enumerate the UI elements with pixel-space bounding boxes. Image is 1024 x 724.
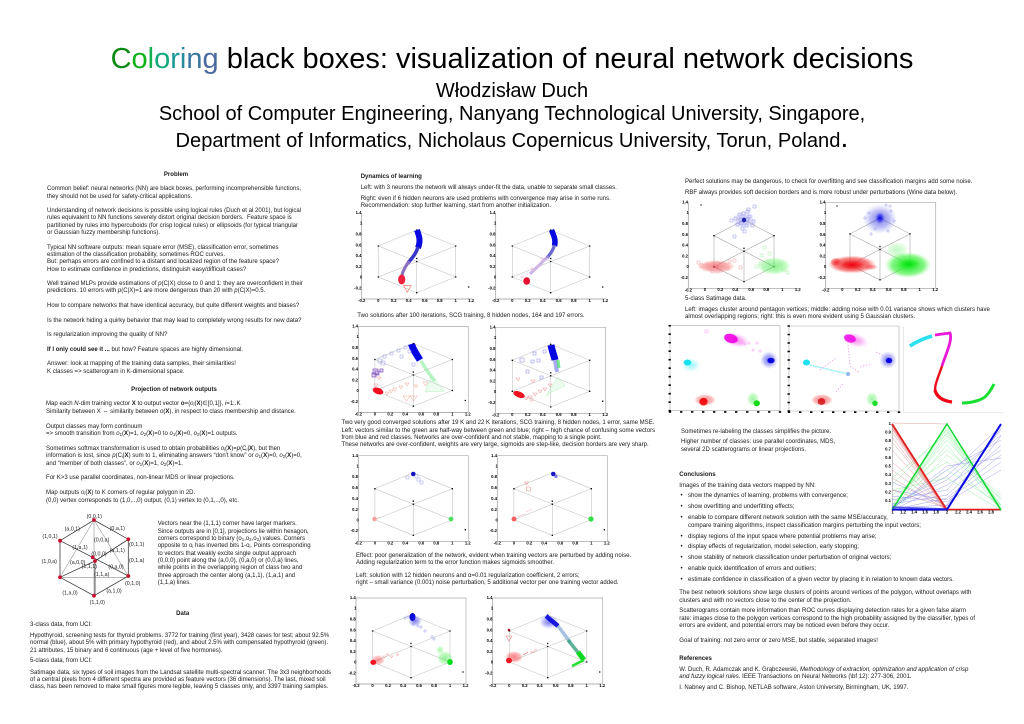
bullet list: conclusions: display regions of the input space where potential problems may arise; <box>688 534 877 540</box>
chart: parallel coordinates: 0.2 <box>885 490 892 494</box>
text: higher number of classes <box>681 438 835 453</box>
text: problem: Understanding of network decisions is possible using logical rules (Duch et al 2001), but logical <box>47 208 301 214</box>
text: hypothyroid: 21 attributes, 15 binary and 6 continuous (age + level of five hormones). <box>30 648 222 654</box>
caption: two solutions after 100 iterations: Two solutions after 100 iterations, SCG training, 8 hidden nodes, 164 and 197 errors. <box>357 313 585 319</box>
text: problem: estimation of the classification probability, sometimes ROC curves. <box>47 252 225 258</box>
text: hexagon explanation: while points in the overlapping region of class two and <box>158 565 302 571</box>
text: projection <box>46 400 302 504</box>
text: scatterograms vs ROC: errors are evident, and potential errors may be noticed even before they occur. <box>679 623 889 629</box>
text: data 5-class label: 5-class data, from UCI: <box>30 658 92 664</box>
diagram: hexagon of output vectors: (1,1,a) <box>94 572 110 578</box>
text: right convergence: Recommendation: stop further learning, start from another initialization. <box>361 203 551 209</box>
text: problem: Is regularization improving the quality of NN? <box>47 332 167 338</box>
bullet list: conclusions: • <box>680 544 683 550</box>
text: satimage description: almost overlapping regions; right: this is even more evident using 5 Gaussian clusters. <box>685 314 915 320</box>
chart: parallel coordinates: 1 <box>889 421 892 426</box>
text: best solutions: clusters and with no vectors close to the center of the projection. <box>679 598 851 604</box>
text: hypothyroid: Hypothyroid, screening tests for thyroid problems. 3772 for training (first year), 3428 cases for test; about 92.5% <box>30 633 329 639</box>
text: problem: partitioned by rules into hypercuboids (for crisp logical rules) or ellipsoids (for typical triangular <box>47 223 298 229</box>
chart: 6 neurons, 100 iterations <box>488 210 609 303</box>
heading: dynamics of learning: Dynamics of learning <box>361 174 422 180</box>
text: reference 1: W. Duch, R. Adamczak and K. Grąbczewski, Methodology of extraction, optimization and application of crisp <box>679 667 968 673</box>
caption: converged solutions: These networks are over-confident, weights are very large, sigmoids are step-like, decision borders are very sharp. <box>342 442 649 448</box>
chart: parallel coordinates: 2.6 <box>977 510 984 514</box>
text: problem: rules equivalent to NN functions severely distort original decision borders. Feature space is <box>47 215 292 221</box>
text: problem: Well trained MLPs provide estimations of p(C|X) close to 0 and 1: they are overconfident in their <box>47 281 303 287</box>
bullet list: conclusions: estimate confidence in classification of a given vector by placing it in relation to known data vectors. <box>688 577 954 583</box>
text: projection: Map each N-dim training vector X to output vector o={oi(X)∈[0,1]}, i=1..K <box>46 401 241 407</box>
chart: satimage clusters <box>668 326 781 412</box>
chart: parallel coordinates: 1 <box>891 510 894 514</box>
heading: references: References <box>679 656 712 662</box>
diagram: hexagon of output vectors: (1,1,0) <box>90 600 105 606</box>
text: effect <box>356 552 631 566</box>
text: projection: Output classes may form continuum <box>46 424 142 430</box>
chart: parallel coordinates: 1.8 <box>933 510 940 514</box>
chart: parallel coordinates: 1.2 <box>900 510 907 514</box>
chart: parallel coordinates: 0.3 <box>885 481 892 486</box>
chart: parallel coordinates: 1.6 <box>922 510 929 514</box>
text: effect: Effect: poor generalization of the network, evident when training vectors are perturbed by adding noise. <box>356 553 631 559</box>
text: hexagon explanation: Vectors near the (1,1,1) corner have larger markers. <box>158 521 297 527</box>
text: right convergence: Right: even if 6 hidden neurons are used problems with convergence may arise in some runs. <box>361 196 611 202</box>
chart: parallel coordinates: 2.2 <box>955 510 962 514</box>
author: Włodzisław Duch <box>436 80 588 102</box>
text: problem: How to compare networks that have identical accuracy, but quite different weights and biases? <box>47 303 299 309</box>
heading: data: Data <box>176 611 189 617</box>
diagram: hexagon of output vectors: (a,1,0) <box>106 589 122 595</box>
caption: 5-class satimage: 5-class Satimage data. <box>685 296 747 302</box>
text: hexagon explanation: three approach the center along (a,1,1), (1,a,1) and <box>158 573 295 579</box>
chart: parallel coordinates: 0.5 <box>885 464 892 468</box>
bullet list: conclusions: show overfitting and underfitting effects; <box>688 504 794 510</box>
bullet list: conclusions: • <box>680 534 683 540</box>
diagram: hexagon of output vectors: (a,0,1) <box>65 527 80 533</box>
chart: parallel coordinates: 2.8 <box>988 510 995 514</box>
text: higher number of classes: Higher number of classes: use parallel coordinates, MDS, <box>681 439 835 445</box>
caption: converged solutions <box>342 420 655 448</box>
text: regularization solution <box>356 572 619 586</box>
affiliation 2: Department of Informatics, Nicholaus Copernicus University, Torun, Poland. <box>176 122 848 154</box>
diagram: hexagon of output vectors <box>42 514 145 606</box>
text: problem: K classes => scatterogram in K-dimensional space. <box>47 369 184 375</box>
text: hexagon explanation <box>158 520 311 586</box>
chart: parallel coordinates: 0.6 <box>885 455 892 460</box>
caption: converged solutions: from blue and red classes. Networks are over-confident and not stable, mapping to a single point. <box>342 435 602 441</box>
chart: satimage with noise <box>788 326 900 412</box>
diagram: hexagon of output vectors: (0,1,0) <box>125 581 141 587</box>
bullet list: conclusions: show the dynamics of learning, problems with convergence; <box>688 493 848 499</box>
chart: parallel coordinates: 2.4 <box>966 510 973 514</box>
text: left underfit: Left: with 3 neurons the network will always under-fit the data, unable to separate small classes. <box>361 185 617 191</box>
bullet list: conclusions: • <box>680 555 683 561</box>
diagram: hexagon of output vectors: (0,0,a) <box>94 538 110 544</box>
text: perfect solutions: Perfect solutions may be dangerous, to check for overfitting and see classification margins add some noise. <box>685 179 972 185</box>
heading: problem: Problem <box>164 172 188 178</box>
text: projection: Sometimes softmax transformation is used to obtain probabilities oi(X)=p(Ci|X), but then <box>46 446 280 452</box>
bullet list: conclusions: enable to compare different network solution with the same MSE/accuracy, <box>688 515 888 521</box>
caption: converged solutions: Two very good converged solutions after 19 K and 22 K iterations, SCG training, 8 hidden nodes, 1 error, same MSE. <box>342 420 654 426</box>
chart: wine data perfect solution <box>681 199 801 292</box>
text: hexagon explanation: Since outputs are in [0,1], projections lie within hexagon, <box>158 529 309 535</box>
diagram: hexagon of output vectors: (0,a,1) <box>110 526 125 532</box>
bullet list: conclusions: compare training algorithms, inspect classification margins perturbing the input vectors; <box>688 523 921 529</box>
bullet list: conclusions: show stability of network classification under perturbation of original vectors; <box>688 555 891 561</box>
text: problem: Answer: look at mapping of the training data samples, their similarities! <box>47 361 236 367</box>
chart: noise perturbation <box>485 595 606 688</box>
caption: converged solutions: Left: vectors similar to the green are half-way between green and blue; right – high chance of confusing some vectors <box>342 428 655 434</box>
text: projection: For K>3 use parallel coordinates, non-linear MDS or linear projections. <box>46 475 235 481</box>
text: conclusions intro: Images of the training data vectors mapped by NN: <box>679 483 816 489</box>
chart: converged solution, 19 K iterations <box>351 324 471 416</box>
title: Coloring black boxes: visualization of neural network decisions <box>111 43 913 75</box>
chart: parallel coordinates: 0.9 <box>885 430 892 434</box>
diagram: hexagon of output vectors: (0,1,a) <box>129 558 145 564</box>
diagram: hexagon of output vectors: (1,a,1) <box>72 545 88 551</box>
diagram: hexagon of output vectors: (a,1,1) <box>110 548 125 554</box>
bullet list: conclusions: • <box>680 577 683 583</box>
text: projection: and “member of both classes”, or o1(X)=1, o2(X)=1. <box>46 461 183 467</box>
chart: over-confident network <box>351 453 471 546</box>
diagram: hexagon of output vectors: (0,0,0) <box>91 552 107 558</box>
text: right convergence <box>361 196 611 209</box>
chart: Gaussian clusters curve <box>904 326 1004 412</box>
text: satimage description <box>685 306 990 320</box>
text: projection: => smooth transition from o1(X)=1, o2(X)=0 to o1(X)=0, o2(X)=1 outputs. <box>46 431 238 437</box>
diagram: hexagon of output vectors: (1,0,a) <box>42 559 57 565</box>
chart: parallel coordinates: 1.4 <box>911 510 918 514</box>
chart: 3 neurons, 100 iterations <box>354 210 475 303</box>
chart: parallel coordinates <box>885 421 1001 514</box>
chart: parallel coordinates: 0.7 <box>885 446 892 452</box>
bullet list: conclusions: enable quick identification of errors and outliers; <box>688 566 816 572</box>
text: satimage: class, has been removed to make small figures more legible, leaving 5 classes only, and 3397 training samples. <box>30 684 328 690</box>
text: scatterograms vs ROC <box>679 608 976 629</box>
text: satimage <box>30 670 331 690</box>
text: hexagon explanation: corners correspond to binary (o1,o2,o3) values. Corners <box>158 536 305 542</box>
chart: converged solution, 22 K iterations <box>488 324 609 417</box>
bullet list: conclusions: display effects of regularization, model selection, early stopping; <box>688 544 859 550</box>
text: problem: predictions. 10 errors with p(C|X)=1 are more dengerous than 20 with p(C|X)=0.5. <box>47 288 265 294</box>
heading: conclusions: Conclusions <box>679 472 716 478</box>
text: problem: or Gaussian fuzzy membership functions). <box>47 230 160 236</box>
text: RBF: RBF always provides soft decision borders and is more robust under perturbations (Wine data below). <box>685 190 957 196</box>
text: problem: Common belief: neural networks (NN) are black boxes, performing incomprehensible functions, <box>47 186 301 192</box>
bullet list: conclusions <box>680 492 954 583</box>
diagram: hexagon of output vectors: (0,0,1) <box>87 514 102 520</box>
bullet list: conclusions: • <box>680 493 683 499</box>
diagram: hexagon of output vectors: (1,a,0) <box>62 591 78 597</box>
text: hexagon explanation: opposite to oi has inverted bits 1-oi. Points corresponding <box>158 543 311 549</box>
text: best solutions: The best network solutions show large clusters of points around vertices of the polygon, without overlaps with <box>679 590 971 596</box>
diagram: hexagon of output vectors: (0,a,0) <box>108 565 124 571</box>
heading: projection of network outputs: Projection of network outputs <box>131 387 217 393</box>
text: reference 1: and fuzzy logical rules. IEEE Transactions on Neural Networks (\bf 12): 277-306, 2001. <box>679 674 912 680</box>
text: hexagon explanation: to vectors that weakly excite single output approach <box>158 551 296 557</box>
diagram: hexagon of output vectors: (1,0,1) <box>42 534 58 540</box>
diagram: hexagon of output vectors: (1,1,1) <box>82 564 97 570</box>
diagram: hexagon of output vectors: (a,0,0) <box>70 560 86 566</box>
text: problem <box>47 186 303 375</box>
text: projection: information is lost, since p(Ci|X) sum to 1, eliminating answers “don’t know” or o1(X)=0, o2(X)=0, <box>46 453 302 459</box>
text: projection: Similarity between X ⇔ similarity between o(X), in respect to class membership and distance. <box>46 409 296 415</box>
text: projection: (0,0) vertex corresponds to (1,0,..,0) output, (0,1) vertex to (0,1,..,0), etc. <box>46 498 239 504</box>
text: reference 2: I. Nabney and C. Bishop, NETLAB software, Aston University, Birmingham, UK, 1997. <box>679 685 908 691</box>
text: scatterograms vs ROC: rate: images close to the polygon vertices correspond to the high probability assigned by the classifier, types of <box>679 616 975 622</box>
text: problem: But: perhaps errors are confined to a distant and localized region of the feature space? <box>47 259 279 265</box>
text: effect: Adding regularization term to the error function makes sigmoids smoother. <box>356 560 554 566</box>
text: scatterograms vs ROC: Scatterograms contain more information than ROC curves displaying detection rates for a given false alarm <box>679 608 966 614</box>
text: best solutions <box>679 590 971 604</box>
text: problem: If I only could see it ... but how? Feature spaces are highly dimensional. <box>47 347 243 353</box>
text: regularization solution: Left: solution with 12 hidden neurons and α=0.01 regularization coefficient, 2 errors; <box>356 573 579 579</box>
chart: over-confident network, second run <box>490 453 610 546</box>
text: hypothyroid: normal (blue), about 5% with primary hypothyroid (red), and about 2.5% with compensated hypothyroid (green). <box>30 640 328 646</box>
chart: wine data with RBF <box>818 199 939 292</box>
text: reference 1 <box>679 666 968 680</box>
chart: parallel coordinates: 0.8 <box>885 438 892 443</box>
chart: parallel coordinates: 0.1 <box>885 498 892 503</box>
bullet list: conclusions: • <box>680 504 683 510</box>
chart: regularized solution <box>348 595 469 688</box>
text: hexagon explanation: (0,0,0) point along the (a,0,0), (0,a,0) or (0,0,a) lines, <box>158 558 299 564</box>
text: satimage description: Left: images cluster around pentagon vertices; middle: adding noise with 0.01 variance shows which clusters have <box>685 307 990 313</box>
diagram: hexagon of output vectors: (0,1,1) <box>129 542 145 548</box>
text: problem: Is the network hiding a quirky behavior that may lead to completely wrong results for new data? <box>47 318 301 324</box>
bullet list: conclusions: • <box>680 515 683 521</box>
text: hypothyroid <box>30 632 329 654</box>
chart: parallel coordinates: 2 <box>946 510 949 514</box>
text: problem: Typical NN software outputs: mean square error (MSE), classification error, sometimes <box>47 245 279 251</box>
text: hexagon explanation: (1,1,a) lines. <box>158 580 191 586</box>
text: problem: they should not be used for safety-critical applications. <box>47 194 192 200</box>
bullet list: conclusions: • <box>680 566 683 572</box>
text: projection: Map outputs oi(X) to K corners of regular polygon in 2D. <box>46 490 195 496</box>
text: re-labeling: Sometimes re-labeling the classes simplifies the picture. <box>681 429 831 435</box>
chart: parallel coordinates: 0.4 <box>885 472 892 477</box>
text: regularization solution: right – small variance (0.001) noise perturbation, 5 additional vector per one training vector added. <box>356 580 619 586</box>
text: satimage: of a central pixels from 4 different spectra are provided as feature vectors (36 dimensions). The last, mixed soil <box>30 677 326 683</box>
text: data 3-class label: 3-class data, from UCI: <box>30 622 92 628</box>
text: satimage: Satimage data, six types of soil images from the Landsat satellite multi-spectral scanner. The 3x3 neighborhoods <box>30 670 331 676</box>
text: higher number of classes: several 2D scatterograms or linear projections. <box>681 447 806 453</box>
text: goal of training: Goal of training: not zero error or zero MSE, but stable, separated images! <box>679 638 878 644</box>
text: problem: How to estimate confidence in predictions, distinguish easy/difficult cases? <box>47 267 246 273</box>
affiliation 1: School of Computer Engineering, Nanyang Technological University, Singapore, <box>159 103 865 125</box>
